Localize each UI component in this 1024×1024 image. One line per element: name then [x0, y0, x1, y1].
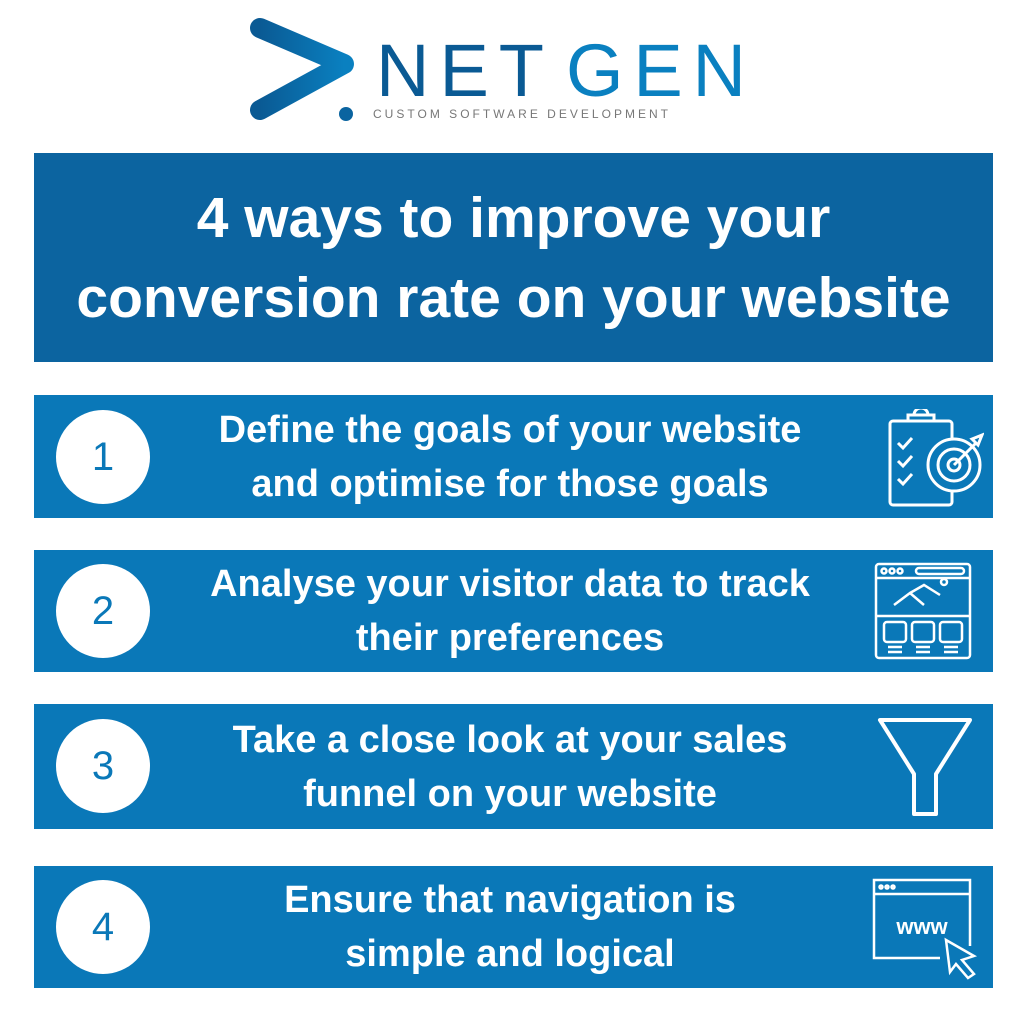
title: 4 ways to improve your — [197, 186, 830, 250]
icon: clipboard target — [888, 409, 984, 506]
number 2: 2 — [92, 589, 114, 633]
panel: step 4 — [34, 866, 993, 988]
text 2: their preferences — [356, 617, 664, 659]
text 3: Take a close look at your sales — [233, 719, 787, 761]
text 4: Ensure that navigation is — [284, 879, 736, 921]
icon: website layout — [874, 562, 972, 660]
icon: funnel — [878, 718, 972, 816]
number 1: 1 — [92, 435, 114, 479]
logo wordmark — [373, 29, 746, 121]
text 2 — [210, 563, 810, 659]
text 1: Define the goals of your website — [219, 409, 801, 451]
text 2: Analyse your visitor data to track — [210, 563, 810, 605]
text 4 — [284, 879, 736, 975]
number 4 — [56, 880, 150, 974]
number 3: 3 — [92, 744, 114, 788]
logo — [250, 18, 746, 121]
number 2 — [56, 564, 150, 658]
text 3: funnel on your website — [303, 773, 717, 815]
title: conversion rate on your website — [76, 266, 951, 330]
number 1 — [56, 410, 150, 504]
icon: www browser: www — [895, 914, 949, 939]
text 1: and optimise for those goals — [251, 463, 769, 505]
logo wordmark: CUSTOM SOFTWARE DEVELOPMENT — [373, 107, 669, 121]
icon: www browser — [872, 878, 977, 980]
number 3 — [56, 719, 150, 813]
text 1 — [219, 409, 801, 505]
text 4: simple and logical — [345, 933, 675, 975]
logo wordmark: NET — [376, 29, 544, 112]
number 4: 4 — [92, 905, 114, 949]
panel: step 3 — [34, 704, 993, 829]
panel: step 2 — [34, 550, 993, 672]
text 3 — [233, 719, 787, 815]
logo chevron — [260, 28, 353, 121]
title — [34, 153, 993, 362]
panel: step 1 — [34, 395, 993, 518]
logo wordmark: GEN — [566, 29, 746, 112]
